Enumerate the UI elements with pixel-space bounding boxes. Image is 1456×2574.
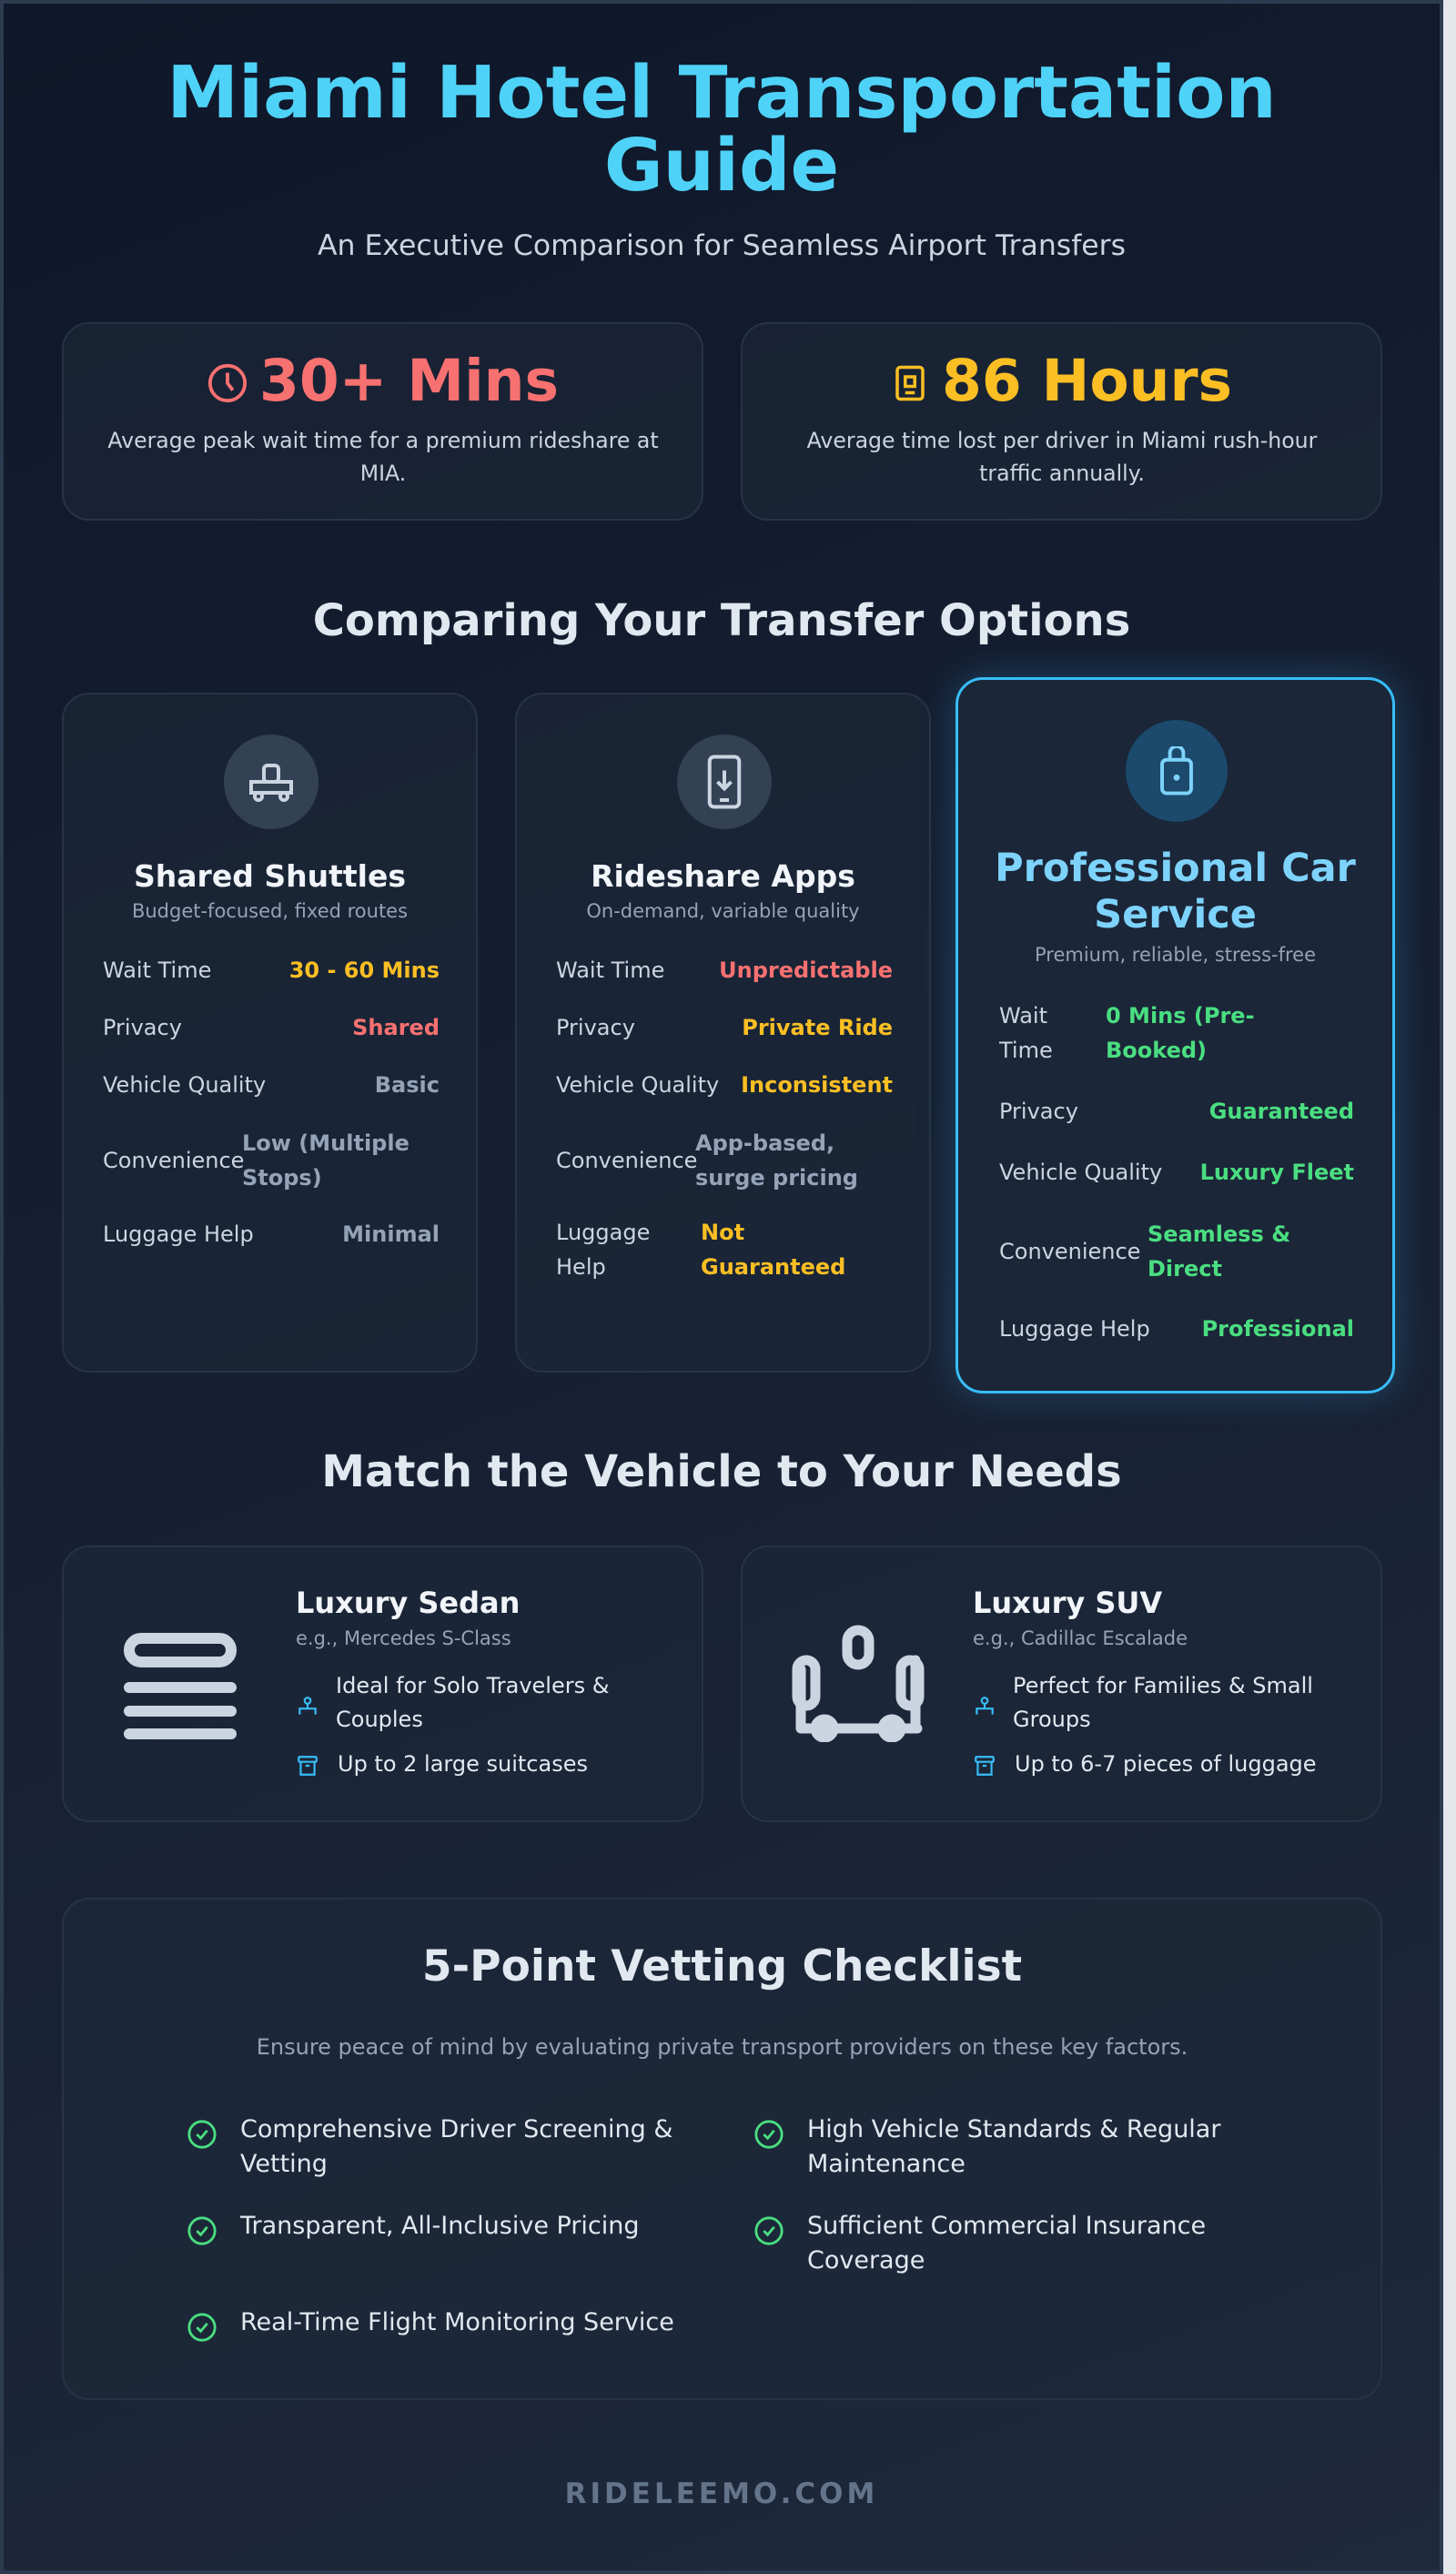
rows: Professional bbox=[1202, 1316, 1354, 1342]
rows: Shared bbox=[352, 1015, 440, 1040]
panel: shared shuttles bbox=[62, 693, 478, 1373]
item 2 bbox=[754, 2115, 1221, 2178]
title: Guide bbox=[604, 124, 839, 208]
rows: Vehicle Quality bbox=[999, 1160, 1162, 1185]
rows: Seamless & bbox=[1148, 1221, 1290, 1247]
feature: travelers bbox=[298, 1673, 609, 1732]
rows: Wait Time bbox=[103, 958, 211, 983]
stat number with clock icon: 30+ Mins bbox=[259, 348, 559, 414]
rows: Direct bbox=[1148, 1256, 1222, 1282]
rows: Low (Multiple bbox=[242, 1130, 410, 1156]
panel: professional car service (highlighted) bbox=[956, 677, 1395, 1393]
rows bbox=[556, 958, 893, 1280]
item 2: High Vehicle Standards & Regular bbox=[807, 2115, 1220, 2143]
stat card: 86 hours bbox=[741, 322, 1382, 521]
rows: Basic bbox=[375, 1072, 440, 1098]
panel: luxury sedan bbox=[62, 1545, 703, 1822]
rows: Guaranteed bbox=[1209, 1099, 1354, 1124]
subtitle: An Executive Comparison for Seamless Airport Transfers bbox=[318, 229, 1126, 262]
icon: suv bbox=[792, 1626, 925, 1742]
title: Rideshare Apps bbox=[591, 858, 855, 894]
item 1 bbox=[187, 2115, 672, 2178]
stat description: Average time lost per driver in Miami rush-hour traffic annually. bbox=[807, 428, 1317, 486]
rows: Wait bbox=[999, 1003, 1047, 1029]
panel: rideshare apps bbox=[515, 693, 931, 1373]
stat card: 30+ mins bbox=[62, 322, 703, 521]
icon: phone bbox=[677, 735, 772, 829]
rows: Privacy bbox=[999, 1099, 1078, 1124]
rows: Wait Time bbox=[556, 958, 664, 983]
checklist title: 5-Point Vetting Checklist bbox=[422, 1941, 1022, 1991]
rows: Not bbox=[701, 1220, 744, 1245]
title: Luxury Sedan bbox=[296, 1586, 520, 1620]
title bbox=[995, 846, 1356, 937]
rows: Luggage Help bbox=[103, 1221, 254, 1247]
footer: RIDELEEMO.COM bbox=[565, 2478, 878, 2510]
stat number with phone icon: 86 Hours bbox=[942, 348, 1232, 414]
item 1: Vetting bbox=[240, 2150, 328, 2178]
subtitle: e.g., Mercedes S-Class bbox=[296, 1627, 511, 1649]
rows: Luggage Help bbox=[999, 1316, 1150, 1342]
subtitle: On-demand, variable quality bbox=[586, 900, 860, 922]
feature: travelers: Ideal for Solo Travelers & bbox=[336, 1673, 609, 1698]
rows: 30 - 60 Mins bbox=[289, 958, 440, 983]
rows: Vehicle Quality bbox=[103, 1072, 266, 1098]
item 1: Comprehensive Driver Screening & bbox=[240, 2115, 672, 2143]
stat description: Average peak wait time for a premium rideshare at MIA. bbox=[107, 428, 659, 486]
rows: Booked) bbox=[1106, 1038, 1207, 1063]
feature: families: Perfect for Families & Small bbox=[1013, 1673, 1313, 1698]
feature: luggage: Up to 6-7 pieces of luggage bbox=[1015, 1751, 1317, 1777]
rows: Luxury Fleet bbox=[1200, 1160, 1354, 1185]
item 2: Maintenance bbox=[807, 2150, 966, 2178]
panel: luxury suv bbox=[741, 1545, 1382, 1822]
feature: luggage: Up to 2 large suitcases bbox=[338, 1751, 588, 1777]
item 5: Real-Time Flight Monitoring Service bbox=[240, 2308, 674, 2336]
title: Miami Hotel Transportation bbox=[167, 51, 1277, 135]
rows: Time bbox=[999, 1038, 1053, 1063]
title bbox=[167, 51, 1277, 208]
subtitle: e.g., Cadillac Escalade bbox=[973, 1627, 1188, 1649]
rows: Help bbox=[556, 1254, 606, 1280]
subtitle: Budget-focused, fixed routes bbox=[132, 900, 408, 922]
rows: Convenience bbox=[556, 1148, 697, 1173]
rows: Inconsistent bbox=[741, 1072, 893, 1098]
rows: Luggage bbox=[556, 1220, 650, 1245]
feature: families bbox=[976, 1673, 1313, 1732]
item 4: Sufficient Commercial Insurance bbox=[807, 2212, 1206, 2240]
feature: travelers: Couples bbox=[336, 1707, 423, 1732]
title: Shared Shuttles bbox=[134, 858, 406, 894]
rows: 0 Mins (Pre- bbox=[1106, 1003, 1255, 1029]
rows: App-based, bbox=[695, 1130, 834, 1156]
icon: bag bbox=[1126, 720, 1228, 822]
item 4 bbox=[754, 2212, 1206, 2275]
rows: Unpredictable bbox=[719, 958, 893, 983]
panel: vetting checklist bbox=[62, 1898, 1382, 2400]
rows: Guaranteed bbox=[701, 1254, 845, 1280]
rows bbox=[103, 958, 440, 1247]
icon: sedan bbox=[124, 1633, 237, 1739]
icon: shuttle bbox=[224, 735, 318, 829]
heading: match vehicle: Match the Vehicle to Your Needs bbox=[321, 1446, 1122, 1497]
checklist subtitle: Ensure peace of mind by evaluating private transport providers on these key factors. bbox=[257, 2034, 1188, 2060]
feature: families: Groups bbox=[1013, 1707, 1091, 1732]
title: Professional Car bbox=[995, 846, 1356, 891]
rows: Private Ride bbox=[742, 1015, 893, 1040]
rows: Minimal bbox=[342, 1221, 440, 1247]
rows bbox=[999, 1003, 1354, 1342]
subtitle: Premium, reliable, stress-free bbox=[1035, 944, 1316, 966]
rows: Stops) bbox=[242, 1165, 322, 1191]
title: Service bbox=[1094, 892, 1257, 937]
rows: surge pricing bbox=[695, 1165, 858, 1191]
rows: Privacy bbox=[103, 1015, 182, 1040]
rows: Vehicle Quality bbox=[556, 1072, 719, 1098]
rows: Privacy bbox=[556, 1015, 635, 1040]
title: Luxury SUV bbox=[973, 1586, 1162, 1620]
rows: Convenience bbox=[999, 1239, 1140, 1264]
heading: comparing: Comparing Your Transfer Options bbox=[313, 595, 1130, 646]
item 4: Coverage bbox=[807, 2246, 925, 2275]
item 3: Transparent, All-Inclusive Pricing bbox=[240, 2212, 640, 2240]
rows: Convenience bbox=[103, 1148, 244, 1173]
